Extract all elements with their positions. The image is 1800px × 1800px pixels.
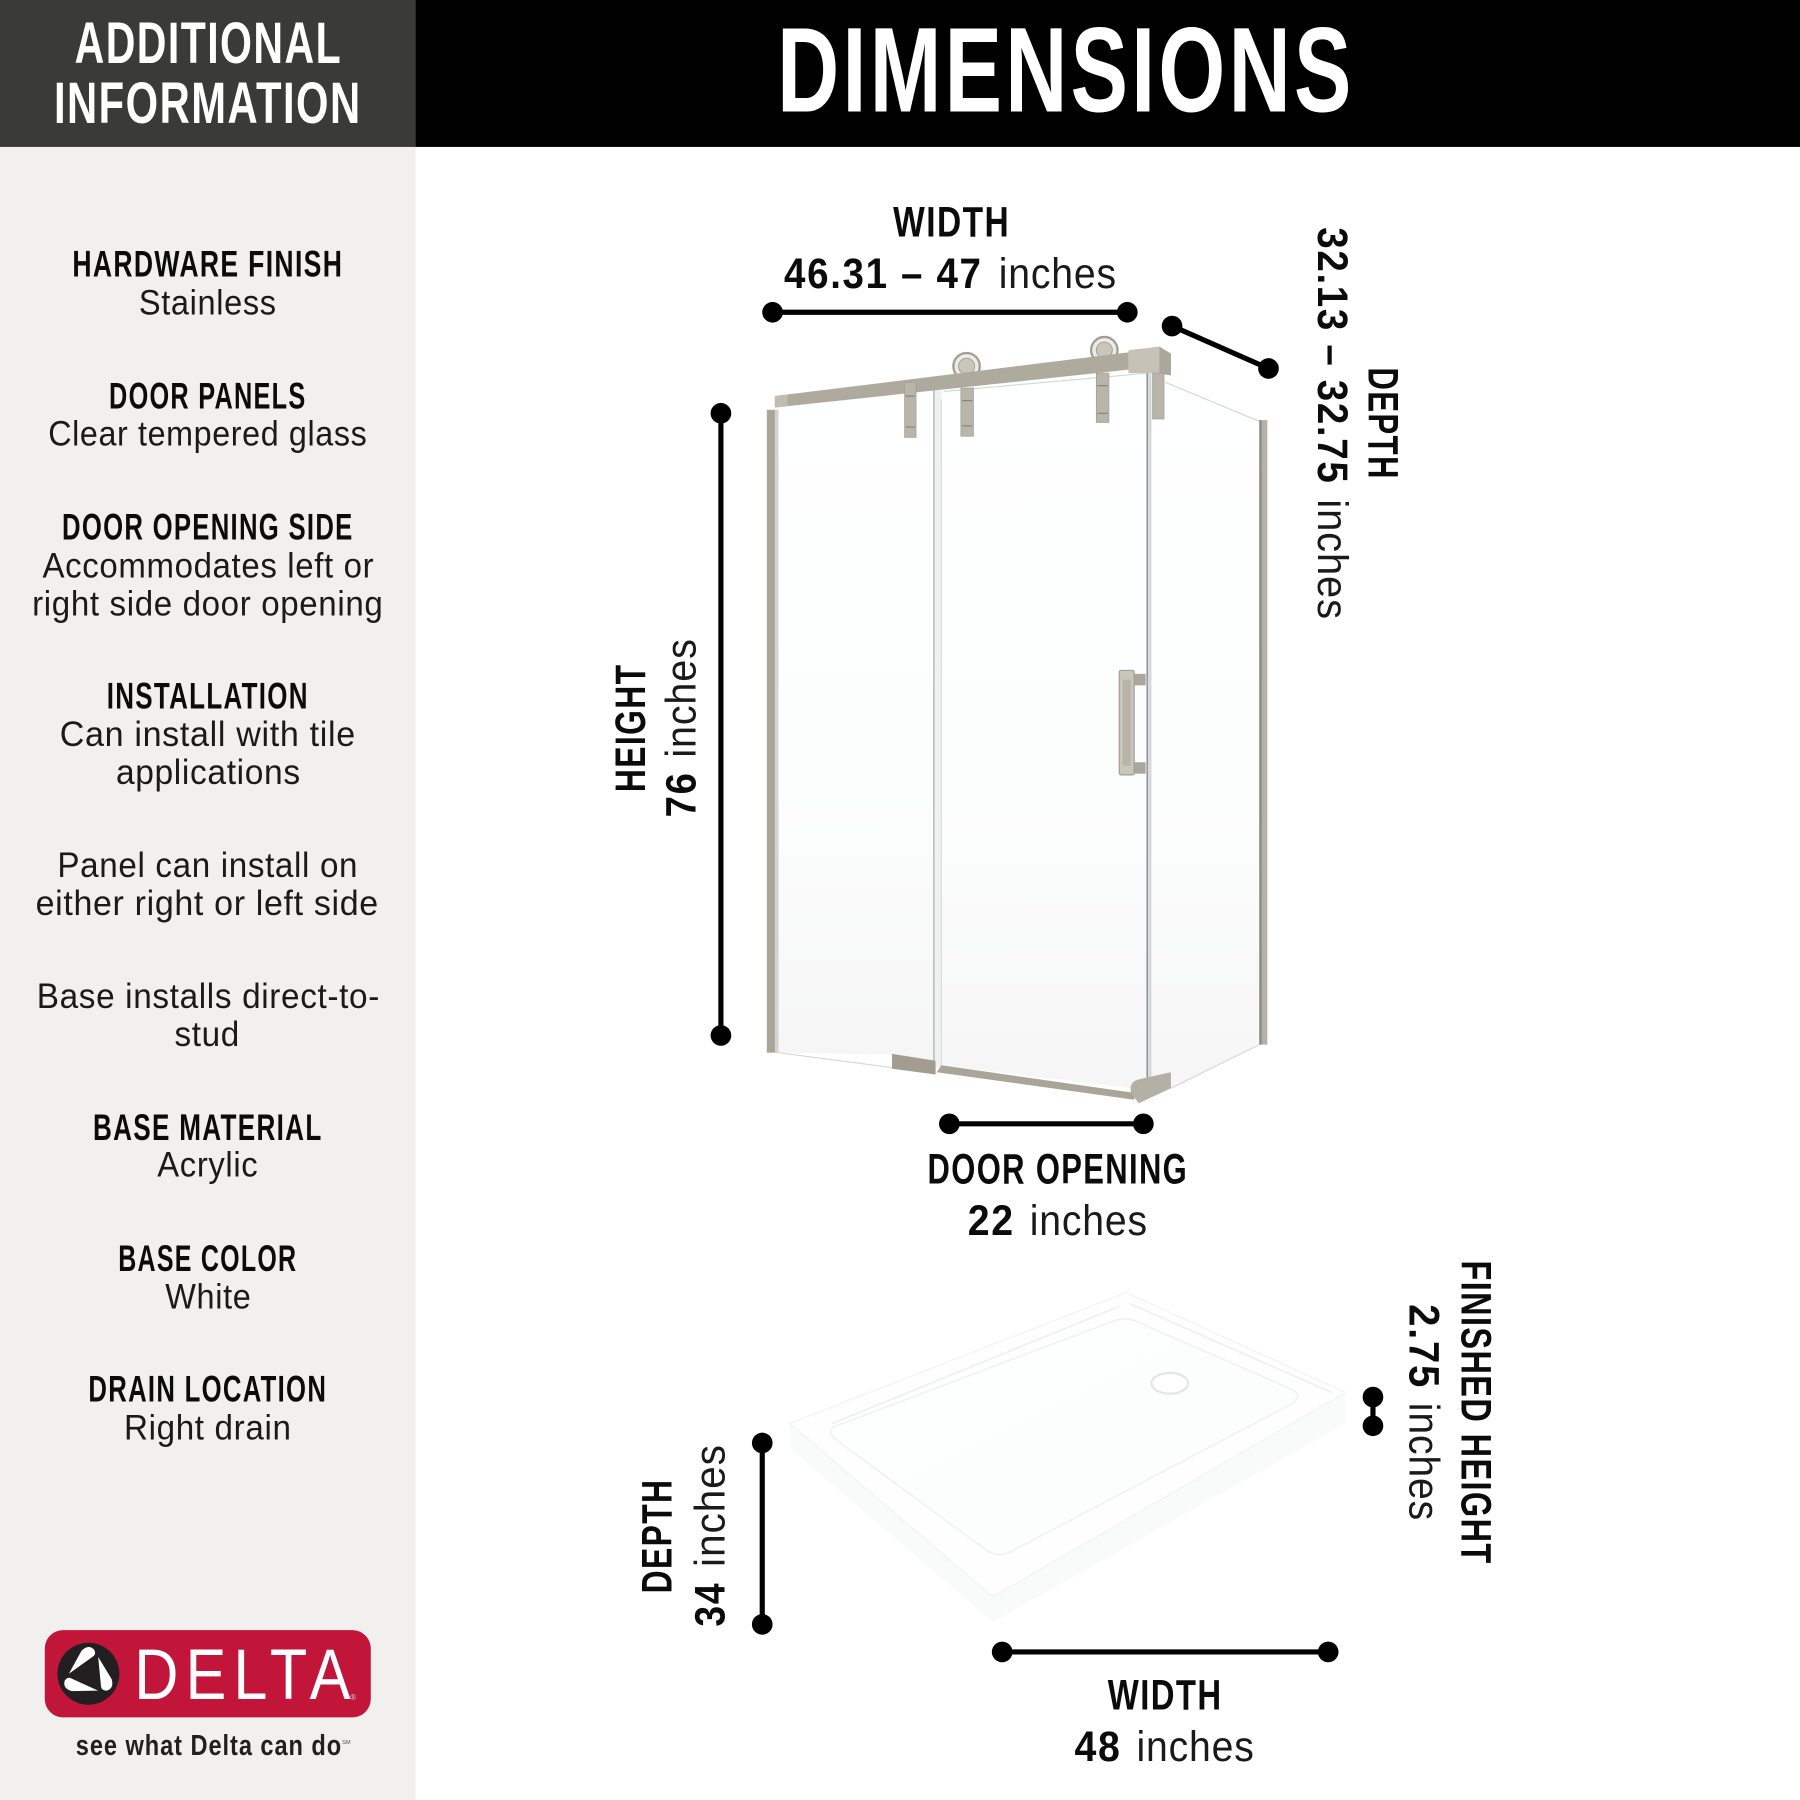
door handle [1119, 670, 1146, 775]
logo: delta [45, 1630, 371, 1762]
dimension: base depth [634, 1433, 773, 1635]
top rail [775, 352, 1128, 408]
dimension: door opening: DOOR OPENING [928, 1146, 1188, 1193]
text block: door opening side [32, 507, 383, 623]
text block: base material [93, 1107, 323, 1185]
dimension: finished height: FINISHED HEIGHT [1452, 1260, 1499, 1565]
dimension: width: WIDTH [893, 198, 1010, 245]
text block: drain location [88, 1369, 327, 1448]
text block: hardware finish [72, 244, 343, 323]
logo: delta: see what Delta can do [76, 1730, 342, 1762]
floor guide [892, 1054, 936, 1074]
text block: drain location: Right drain [124, 1408, 292, 1448]
text block: base color [118, 1238, 297, 1317]
bottom door rail [937, 1065, 1134, 1100]
glass: sliding door [941, 373, 1148, 1088]
dimension: finished height: 2.75 [1401, 1304, 1448, 1389]
panel: sidebar [0, 147, 416, 1800]
dimension: width [762, 198, 1138, 323]
logo: delta: SM [342, 1740, 351, 1746]
text block: base color: White [165, 1277, 251, 1317]
base: rim grooves [832, 1304, 1332, 1423]
glass: left fixed panel [778, 390, 936, 1061]
heading: additional information: INFORMATION [54, 71, 362, 136]
dimension: base width: 48 [1074, 1723, 1122, 1770]
text block: door opening side: right side door opening [32, 583, 383, 623]
text block: base material: Acrylic [157, 1145, 258, 1185]
text block: base color: BASE COLOR [118, 1238, 297, 1279]
dimension: door opening: inches [1030, 1197, 1148, 1244]
hanger marks [906, 386, 1108, 427]
glass: side panel [1150, 373, 1259, 1088]
text block: drain location: DRAIN LOCATION [88, 1369, 327, 1410]
logo: delta: ® [350, 1693, 356, 1702]
dimension: depth [1162, 227, 1406, 620]
dimension: base depth: DEPTH [634, 1479, 681, 1593]
heading: additional information: ADDITIONAL [75, 11, 342, 76]
glass edges [778, 373, 1259, 1088]
dimension: depth: 32.13 – 32.75 [1309, 227, 1356, 484]
text block: panel installation: Panel can install on [57, 845, 358, 885]
dimension: height: HEIGHT [607, 664, 654, 792]
text block: base installation [37, 976, 380, 1054]
heading: additional information [0, 0, 416, 147]
roller left [953, 353, 980, 379]
text block: installation [60, 675, 356, 792]
dimension: base width [992, 1642, 1339, 1770]
chart: shower enclosure [767, 337, 1267, 1103]
dimension: base width: inches [1136, 1723, 1255, 1770]
text block: installation: applications [116, 752, 301, 792]
dimension: finished height [1363, 1260, 1499, 1565]
door edge right [1147, 373, 1150, 1085]
text block: base installation: Base installs direct-to- [37, 976, 380, 1016]
text block: installation: INSTALLATION [107, 675, 309, 716]
base: top surface [790, 1293, 1345, 1597]
dimension: height: inches [658, 638, 705, 758]
title: dimensions: DIMENSIONS [777, 2, 1355, 137]
text block: panel installation: either right or left side [36, 883, 379, 923]
dimension: finished height: inches [1401, 1403, 1448, 1521]
text block: door panels: DOOR PANELS [109, 376, 307, 417]
dimension: width: 46.31 – 47 [784, 250, 983, 297]
dimension: depth: inches [1309, 499, 1356, 620]
text block: door panels: Clear tempered glass [48, 413, 367, 453]
roller right [1091, 337, 1118, 363]
dimension: width: inches [999, 250, 1117, 297]
right wall post [1259, 420, 1267, 1045]
dimension: height: 76 [658, 771, 705, 817]
text block: door opening side: DOOR OPENING SIDE [62, 507, 354, 548]
corner bracket [1128, 347, 1171, 375]
dimension: depth: DEPTH [1359, 367, 1406, 480]
text block: door panels [48, 376, 367, 453]
dimension: base depth: inches [686, 1444, 733, 1567]
base: side faces [790, 1392, 1345, 1622]
text block: base material: BASE MATERIAL [93, 1107, 323, 1148]
base: drain [1151, 1373, 1188, 1394]
dimension: base depth: 34 [686, 1582, 733, 1627]
chart: shower base [790, 1293, 1345, 1622]
door edge left [934, 390, 941, 1068]
hangers [905, 373, 1164, 437]
dimension: height [607, 403, 731, 1046]
text block: hardware finish: Stainless [139, 283, 277, 323]
dimension: base width: WIDTH [1108, 1671, 1223, 1718]
text block: installation: Can install with tile [60, 714, 356, 754]
dimension: door opening [928, 1114, 1188, 1244]
text block: panel installation [36, 845, 379, 923]
text block: hardware finish: HARDWARE FINISH [72, 244, 343, 285]
dimension: door opening: 22 [968, 1197, 1015, 1244]
title: dimensions [416, 0, 1800, 147]
text block: door opening side: Accommodates left or [42, 545, 374, 585]
bottom corner [1131, 1072, 1171, 1103]
left wall post [767, 410, 778, 1053]
text block: base installation: stud [174, 1014, 240, 1054]
logo: delta: DELTA [134, 1636, 351, 1715]
base: inner basin [830, 1319, 1298, 1555]
